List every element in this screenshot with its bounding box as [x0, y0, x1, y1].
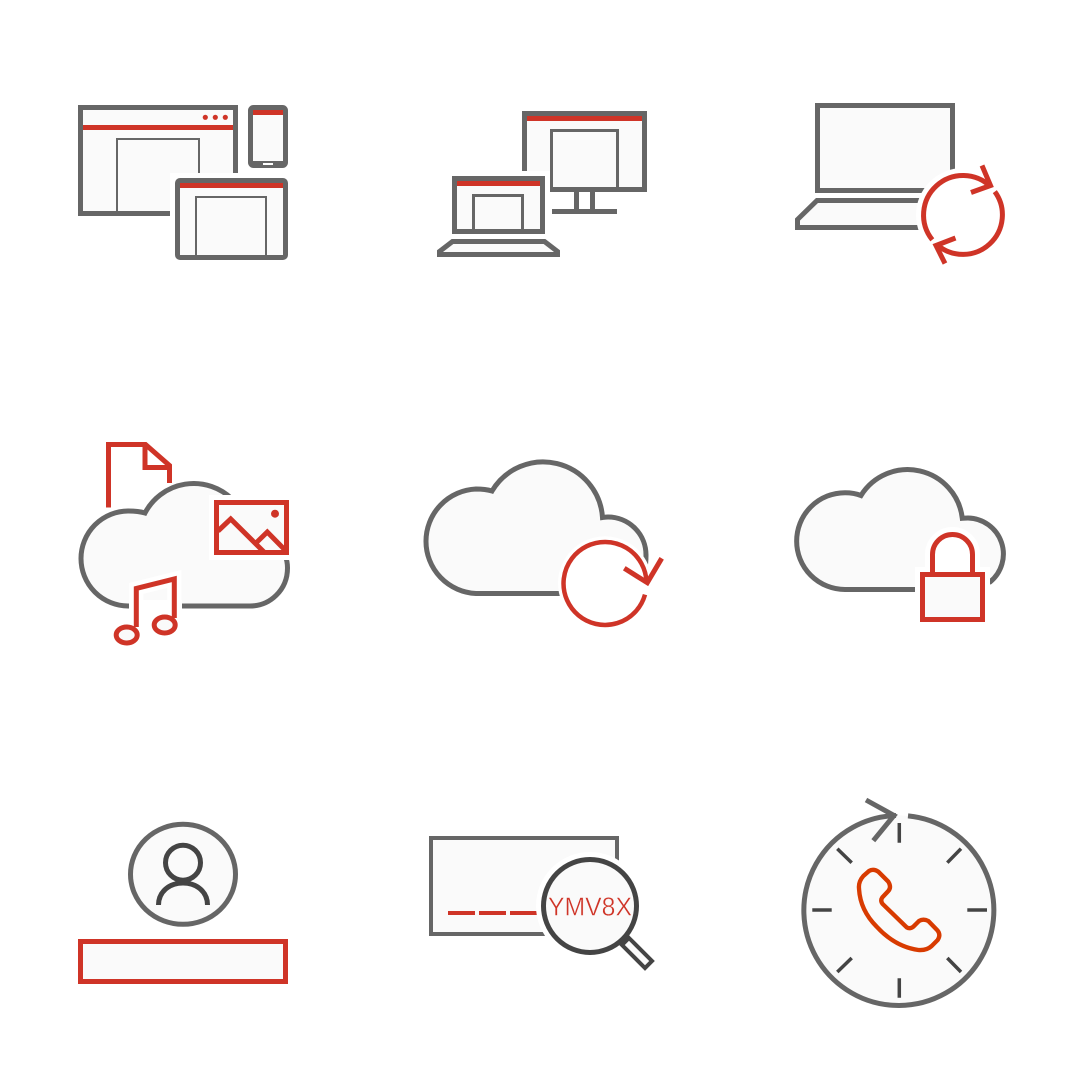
phone handset	[859, 870, 939, 950]
dashes	[448, 911, 537, 915]
icon: cloud with files	[81, 444, 294, 643]
icon: browser, phone and tablet	[80, 108, 286, 258]
icon: user account	[80, 824, 286, 982]
code text: YMV8X	[548, 892, 632, 922]
cloud	[81, 484, 288, 606]
tablet	[170, 173, 286, 258]
laptop	[440, 178, 558, 254]
clock face	[804, 816, 994, 1006]
file	[108, 444, 170, 508]
clock ticks	[812, 823, 987, 998]
clock ring	[804, 816, 994, 1005]
music note	[116, 579, 182, 643]
cloud	[797, 470, 1003, 590]
browser window	[80, 108, 236, 214]
sync arrows	[916, 166, 1010, 264]
laptop	[798, 106, 960, 228]
icon: monitor and laptop	[440, 114, 647, 254]
icon: cloud refresh	[426, 462, 662, 630]
card	[431, 838, 617, 934]
padlock	[915, 534, 990, 627]
monitor	[518, 114, 647, 214]
icon: code search	[431, 838, 652, 968]
arrow head	[866, 800, 894, 841]
avatar circle	[130, 824, 236, 924]
magnifier	[536, 852, 652, 968]
cloud	[426, 462, 646, 594]
image	[209, 495, 294, 560]
icon: laptop sync	[798, 106, 1010, 264]
person	[158, 845, 208, 905]
icon: cloud lock	[797, 470, 1003, 627]
name field	[80, 942, 286, 982]
refresh arrow	[558, 536, 662, 630]
icon: phone call timer	[804, 800, 994, 1006]
phone	[250, 108, 286, 166]
